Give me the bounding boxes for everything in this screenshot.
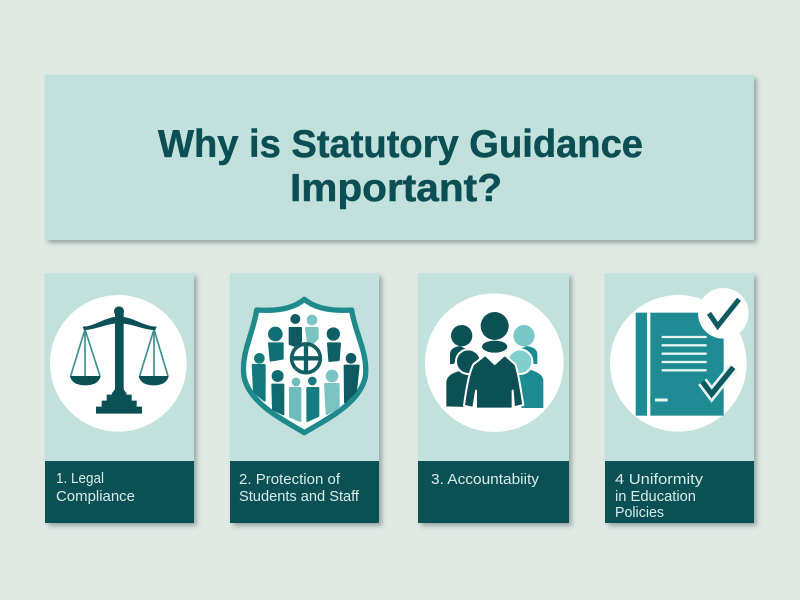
label: card 4: 4 Uniformity — [615, 472, 704, 488]
icon: group of people — [425, 293, 564, 432]
icon: scales of justice — [50, 295, 187, 432]
label: card 4: Policies — [615, 505, 664, 521]
title: Why is Statutory Guidance — [158, 123, 643, 166]
panel: title banner — [45, 75, 757, 243]
label: card 3: 3. Accountabiity — [431, 472, 540, 488]
label: card 2: 2. Protection of — [239, 472, 341, 488]
title: Important? — [290, 167, 502, 210]
icon: policy document with checkmarks — [610, 288, 749, 432]
label: card 1 — [56, 471, 135, 505]
label: card 2 — [239, 472, 360, 505]
label: card 2: Students and Staff — [239, 489, 360, 505]
panel: card 1 legal compliance — [45, 273, 197, 526]
title — [158, 123, 643, 210]
label: card 4 — [615, 472, 704, 521]
icon: shield with people — [243, 299, 366, 433]
panel: card 2 protection of students and staff — [230, 273, 382, 526]
label: card 1: Compliance — [56, 489, 135, 505]
panel: card 3 accountability — [418, 273, 572, 526]
panel: card 4 uniformity in education policies — [605, 273, 757, 526]
label: card 1: 1. Legal — [56, 471, 104, 487]
label: card 4: in Education — [615, 489, 696, 505]
